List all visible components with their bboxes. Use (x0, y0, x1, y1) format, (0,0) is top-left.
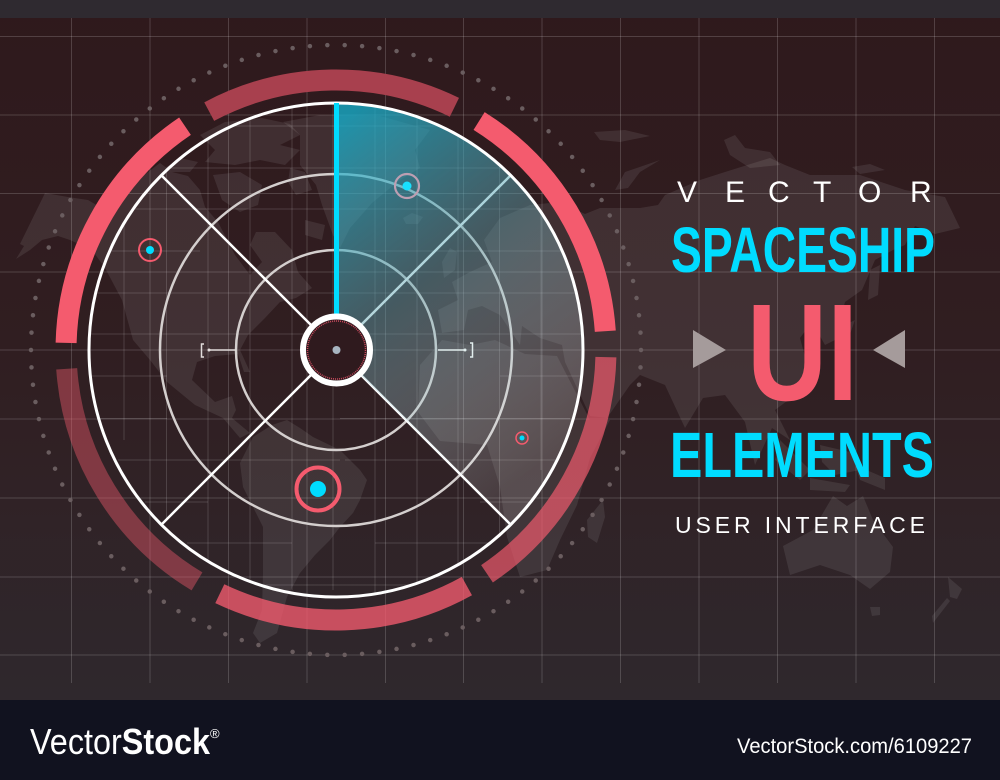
arc: lower right (487, 357, 606, 574)
map: greenland (283, 115, 430, 248)
map: islands and arctic russia (403, 130, 885, 543)
arrow: left pointer (693, 330, 726, 368)
map: europe and asia (438, 158, 960, 465)
right range bracket (438, 343, 472, 357)
target marker: east small (516, 432, 528, 444)
heading: ui: UI (747, 276, 858, 430)
arc: lower left (67, 369, 197, 581)
radar (89, 103, 583, 597)
map: arctic islands (165, 118, 325, 240)
radar inner grid (90, 100, 590, 600)
map: tasmania and new zealand (870, 577, 962, 623)
footer bar (0, 700, 1000, 780)
target marker: north west (139, 239, 161, 261)
radar concentric rings (160, 174, 512, 526)
footer image id: VectorStock.com/6109227 (737, 735, 972, 758)
radar outer ring (89, 103, 583, 597)
sweep line (334, 103, 339, 317)
outer segmented arcs (66, 80, 606, 620)
radar cross lines (161, 175, 511, 525)
subheading: user interface: USER INTERFACE (675, 512, 925, 538)
map: australia (783, 496, 893, 589)
radar sweep wedge (336, 103, 583, 525)
heading: vector: VECTOR (677, 176, 932, 209)
footer logo: VectorStock (30, 721, 211, 762)
map: africa (418, 340, 610, 577)
radar hub (303, 316, 370, 384)
world map (16, 115, 962, 643)
arrow: right pointer (873, 330, 905, 368)
arc: top (209, 80, 454, 112)
dotted outer ring (31, 45, 641, 655)
map: south america (240, 420, 367, 643)
arc: upper left (66, 126, 185, 343)
map: north america (16, 163, 312, 438)
arc: bottom (220, 586, 467, 620)
target marker: north (395, 174, 419, 198)
target marker: south large (296, 468, 340, 510)
arc: upper right (479, 121, 605, 331)
footer registered mark: ® (210, 726, 220, 741)
left range bracket (202, 344, 236, 357)
